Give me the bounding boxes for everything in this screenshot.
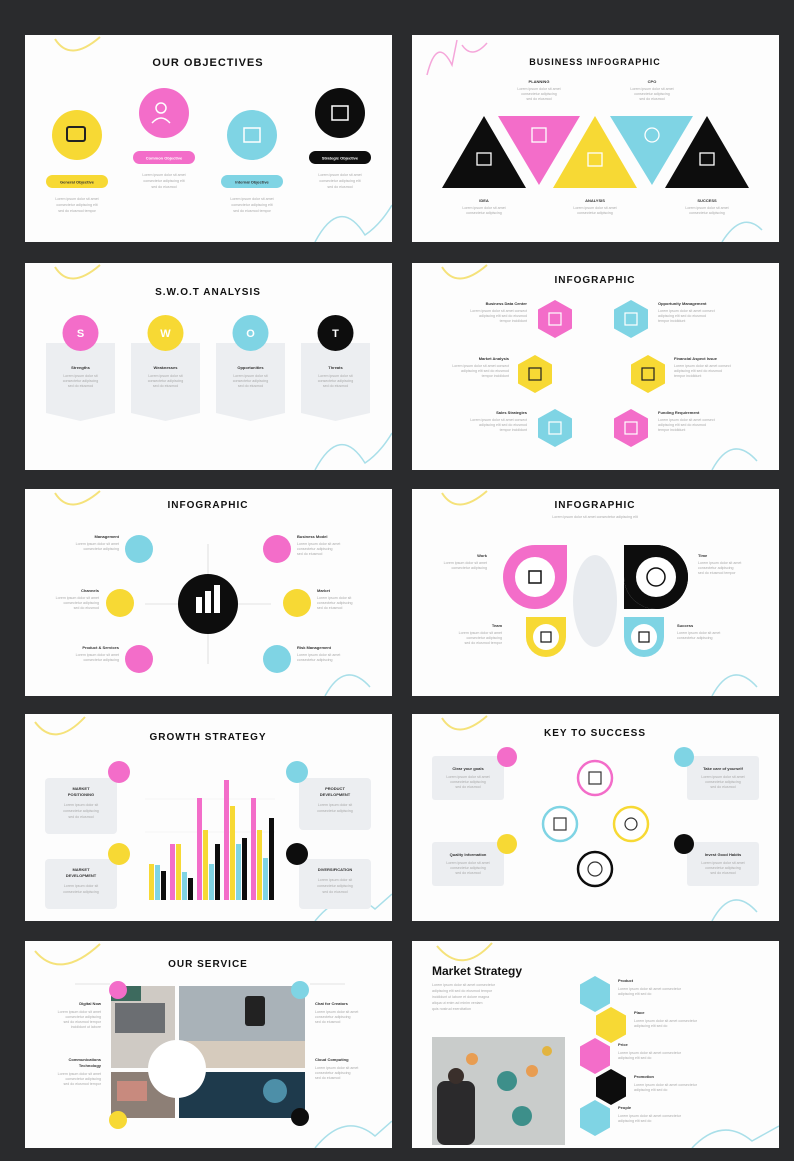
corner boxes: sed do eiusmod bbox=[455, 871, 481, 875]
hexagon labels: adipiscing elit sed do bbox=[634, 1024, 667, 1028]
left boxes: consectetur adipiscing bbox=[63, 890, 99, 894]
swot columns: Weaknesses bbox=[154, 365, 178, 370]
text left: tempor incididunt bbox=[500, 319, 527, 323]
hexagon labels: Lorem ipsum dolor sit amet consectetur bbox=[634, 1019, 698, 1023]
objective: pink: sed do eiusmod bbox=[151, 185, 177, 189]
swot columns: Threats bbox=[328, 365, 343, 370]
service text left: incididunt ut labore bbox=[71, 1025, 101, 1029]
hexagon labels: Promotion bbox=[634, 1074, 655, 1079]
hub text right bbox=[297, 534, 353, 662]
service text right: Chat for Creators bbox=[315, 1001, 349, 1006]
text left: Lorem ipsum dolor sit amet consect bbox=[470, 309, 527, 313]
hexagon labels: People bbox=[618, 1105, 632, 1110]
hub text right: Risk Management bbox=[297, 645, 332, 650]
service text left: sed do eiusmod tempor bbox=[63, 1082, 102, 1086]
text left: adipiscing elit sed do eiusmod bbox=[461, 369, 509, 373]
hub text right: Lorem ipsum dolor sit bbox=[317, 596, 351, 600]
swot columns: Lorem ipsum dolor sit bbox=[63, 374, 98, 378]
objective: black: Strategic Objective bbox=[322, 156, 359, 160]
teardrop labels: Time bbox=[698, 553, 708, 558]
teardrop labels: consectetur adipiscing bbox=[451, 566, 487, 570]
swot columns: sed do eiusmod bbox=[238, 384, 263, 388]
swot columns bbox=[46, 315, 370, 421]
hub text right: sed do eiusmod bbox=[317, 606, 342, 610]
service text right: Lorem ipsum dolor sit amet bbox=[315, 1010, 358, 1014]
title: Market Strategy bbox=[432, 964, 522, 978]
photo collage bbox=[75, 981, 345, 1129]
text right: tempor incididunt bbox=[658, 428, 685, 432]
teardrop labels: Lorem ipsum dolor sit amet bbox=[444, 561, 487, 565]
text right: adipiscing elit sed do eiusmod bbox=[658, 423, 706, 427]
swot columns: consectetur adipiscing bbox=[63, 379, 98, 383]
hub text left: Lorem ipsum dolor sit amet bbox=[76, 653, 119, 657]
corner boxes: Take care of yourself bbox=[703, 766, 744, 771]
teardrop labels: consectetur adipiscing bbox=[677, 636, 713, 640]
labels bottom: SUCCESS bbox=[697, 198, 717, 203]
corner boxes: Quality Information bbox=[450, 852, 487, 857]
text left: tempor incididunt bbox=[482, 374, 509, 378]
labels bottom: consectetur adipiscing bbox=[577, 211, 613, 215]
title: GROWTH STRATEGY bbox=[149, 732, 267, 743]
labels top: sed do eiusmod bbox=[639, 97, 665, 101]
left boxes: DEVELOPMENT bbox=[66, 873, 97, 878]
title: OUR SERVICE bbox=[168, 959, 248, 970]
corner boxes: Clear your goals bbox=[452, 766, 484, 771]
title: KEY TO SUCCESS bbox=[544, 728, 646, 739]
hub text right: Lorem ipsum dolor sit amet bbox=[297, 542, 340, 546]
objective: yellow: Lorem ipsum dolor sit amet bbox=[55, 197, 99, 201]
labels bottom: ANALYSIS bbox=[585, 198, 605, 203]
teardrop labels: Lorem ipsum dolor sit amet bbox=[459, 631, 502, 635]
teardrop labels: Lorem ipsum dolor sit amet bbox=[698, 561, 741, 565]
labels top: sed do eiusmod bbox=[526, 97, 552, 101]
labels bottom: consectetur adipiscing bbox=[466, 211, 502, 215]
left boxes: Lorem ipsum dolor sit bbox=[64, 884, 98, 888]
swot columns: sed do eiusmod bbox=[323, 384, 348, 388]
title: S.W.O.T ANALYSIS bbox=[155, 287, 261, 298]
labels bottom bbox=[462, 198, 729, 215]
labels top: Lorem ipsum dolor sit amet bbox=[517, 87, 561, 91]
intro text: aliqua ut enim ad minim veniam bbox=[432, 1001, 483, 1005]
title: BUSINESS INFOGRAPHIC bbox=[529, 57, 661, 67]
intro text: incididunt ut labore et dolore magna bbox=[432, 995, 489, 999]
hub text left: Product & Services bbox=[82, 645, 120, 650]
text right: Lorem ipsum dolor sit amet consect bbox=[658, 309, 715, 313]
service text right: consectetur adipiscing bbox=[315, 1015, 351, 1019]
hub text left: consectetur adipiscing bbox=[63, 601, 99, 605]
hub text left: Lorem ipsum dolor sit amet bbox=[76, 542, 119, 546]
right boxes: PRODUCT bbox=[325, 786, 345, 791]
text left: adipiscing elit sed do eiusmod bbox=[479, 423, 527, 427]
hub text left bbox=[56, 534, 120, 662]
objective: pink bbox=[133, 88, 195, 189]
text left: adipiscing elit sed do eiusmod bbox=[479, 314, 527, 318]
service text left: sed do eiusmod tempor bbox=[63, 1020, 102, 1024]
ring icons bbox=[543, 761, 648, 886]
swot columns: S bbox=[77, 328, 84, 340]
teardrop diagram bbox=[503, 545, 688, 657]
labels bottom: consectetur adipiscing bbox=[689, 211, 725, 215]
text right: adipiscing elit sed do eiusmod bbox=[674, 369, 722, 373]
objective: yellow: sed do eiusmod tempor bbox=[58, 209, 97, 213]
swot columns: O bbox=[246, 328, 255, 340]
objective: pink: Common Objective bbox=[146, 156, 183, 160]
service text right: sed do eiusmod bbox=[315, 1020, 340, 1024]
slide: infographic teardrops bbox=[412, 489, 779, 696]
text left: Business Data Center bbox=[486, 301, 527, 306]
teardrop labels: consectetur adipiscing bbox=[698, 566, 734, 570]
hub text left: consectetur adipiscing bbox=[83, 658, 119, 662]
corner boxes: Lorem ipsum dolor sit amet bbox=[446, 861, 490, 865]
bar chart bbox=[145, 780, 275, 900]
text right: tempor incididunt bbox=[658, 319, 685, 323]
photo bbox=[432, 1037, 565, 1145]
right boxes: Lorem ipsum dolor sit bbox=[318, 803, 352, 807]
left boxes bbox=[45, 761, 130, 909]
service text right: Lorem ipsum dolor sit amet bbox=[315, 1066, 358, 1070]
text left: Lorem ipsum dolor sit amet consect bbox=[452, 364, 509, 368]
corner boxes: consectetur adipiscing bbox=[450, 866, 486, 870]
swot columns: sed do eiusmod bbox=[68, 384, 93, 388]
labels top bbox=[517, 79, 674, 101]
hub text right: consectetur adipiscing bbox=[317, 601, 353, 605]
corner boxes: consectetur adipiscing bbox=[450, 780, 486, 784]
hexagon labels: Product bbox=[618, 978, 634, 983]
service text left: consectetur adipiscing bbox=[65, 1077, 101, 1081]
text right: Funding Requirement bbox=[658, 410, 700, 415]
labels bottom: IDEA bbox=[479, 198, 489, 203]
service text left: consectetur adipiscing bbox=[65, 1015, 101, 1019]
left boxes: MARKET bbox=[72, 786, 90, 791]
text left: tempor incididunt bbox=[500, 428, 527, 432]
corner boxes: Lorem ipsum dolor sit amet bbox=[446, 775, 490, 779]
right boxes: consectetur adipiscing bbox=[317, 884, 353, 888]
triangles chart bbox=[442, 116, 749, 188]
title: OUR OBJECTIVES bbox=[152, 57, 264, 69]
objective: black: sed do eiusmod bbox=[327, 185, 353, 189]
right boxes bbox=[286, 761, 371, 909]
hexagon labels bbox=[618, 978, 698, 1123]
service text left bbox=[58, 1001, 102, 1086]
left boxes: Lorem ipsum dolor sit bbox=[64, 803, 98, 807]
objective: black bbox=[309, 88, 371, 189]
swot columns: Lorem ipsum dolor sit bbox=[233, 374, 268, 378]
swot columns: Strengths bbox=[71, 365, 91, 370]
hub text left: consectetur adipiscing bbox=[83, 547, 119, 551]
service text right: sed do eiusmod bbox=[315, 1076, 340, 1080]
hub text right: consectetur adipiscing bbox=[297, 547, 333, 551]
hexagon labels: Lorem ipsum dolor sit amet consectetur bbox=[618, 1114, 682, 1118]
service text left: Lorem ipsum dolor sit amet bbox=[58, 1072, 101, 1076]
objective: black: consectetur adipiscing elit bbox=[319, 179, 361, 183]
swot columns: T bbox=[332, 328, 339, 340]
slide: business infographic bbox=[412, 35, 779, 242]
hub text right: Lorem ipsum dolor sit amet bbox=[297, 653, 340, 657]
teardrop labels bbox=[444, 553, 741, 645]
corner boxes bbox=[432, 747, 759, 886]
text right: Lorem ipsum dolor sit amet consect bbox=[658, 418, 715, 422]
text left: Sales Strategies bbox=[496, 410, 528, 415]
labels bottom: Lorem ipsum dolor sit amet bbox=[573, 206, 617, 210]
objective: cyan: Lorem ipsum dolor sit amet bbox=[230, 197, 274, 201]
service text right: consectetur adipiscing bbox=[315, 1071, 351, 1075]
hexagon stack bbox=[580, 976, 626, 1136]
corner boxes: consectetur adipiscing bbox=[705, 866, 741, 870]
objective: black: Lorem ipsum dolor sit amet bbox=[318, 173, 362, 177]
hub text right: sed do eiusmod bbox=[297, 552, 322, 556]
labels top: PLANNING bbox=[529, 79, 549, 84]
slide: our objectives bbox=[25, 35, 392, 242]
text right: Financial Aspect Issue bbox=[674, 356, 718, 361]
right boxes: consectetur adipiscing bbox=[317, 809, 353, 813]
hub text left: Channels bbox=[81, 588, 100, 593]
hexagon grid bbox=[518, 300, 665, 447]
hub text left: Management bbox=[95, 534, 120, 539]
intro text: adipiscing elit sed do eiusmod tempor bbox=[432, 989, 493, 993]
hub text right: consectetur adipiscing bbox=[297, 658, 333, 662]
hexagon labels: Place bbox=[634, 1010, 645, 1015]
hexagon labels: Lorem ipsum dolor sit amet consectetur bbox=[618, 1051, 682, 1055]
teardrop labels: sed do eiusmod tempor bbox=[464, 641, 503, 645]
hexagon labels: adipiscing elit sed do bbox=[618, 1119, 651, 1123]
service text right: Cloud Computing bbox=[315, 1057, 349, 1062]
swot columns: sed do eiusmod bbox=[153, 384, 178, 388]
objective: yellow bbox=[46, 110, 108, 213]
objective: cyan: sed do eiusmod tempor bbox=[233, 209, 272, 213]
slide: key to success bbox=[412, 714, 779, 921]
service text left: Communications bbox=[69, 1057, 102, 1062]
text right: Lorem ipsum dolor sit amet consect bbox=[674, 364, 731, 368]
swot columns: Opportunities bbox=[237, 365, 264, 370]
corner boxes: sed do eiusmod bbox=[710, 785, 736, 789]
text left: Lorem ipsum dolor sit amet consect bbox=[470, 418, 527, 422]
hub diagram bbox=[106, 535, 311, 673]
hub text right: Business Model bbox=[297, 534, 327, 539]
hub text left: sed do eiusmod bbox=[74, 606, 99, 610]
hexagon labels: Price bbox=[618, 1042, 629, 1047]
corner boxes: sed do eiusmod bbox=[710, 871, 736, 875]
hexagon labels: adipiscing elit sed do bbox=[618, 992, 651, 996]
slide: swot analysis bbox=[25, 263, 392, 470]
teardrop labels: Lorem ipsum dolor sit amet bbox=[677, 631, 720, 635]
corner boxes: Lorem ipsum dolor sit amet bbox=[701, 861, 745, 865]
objective: cyan bbox=[221, 110, 283, 213]
objective: cyan: consectetur adipiscing elit bbox=[231, 203, 273, 207]
text right bbox=[658, 301, 731, 432]
labels bottom: Lorem ipsum dolor sit amet bbox=[685, 206, 729, 210]
intro text: Lorem ipsum dolor sit amet consectetur bbox=[432, 983, 496, 987]
teardrop labels: sed do eiusmod tempor bbox=[698, 571, 736, 575]
slide: our service bbox=[25, 941, 392, 1148]
slide: growth strategy bbox=[25, 714, 392, 921]
title: INFOGRAPHIC bbox=[554, 500, 636, 511]
hexagon labels: Lorem ipsum dolor sit amet consectetur bbox=[618, 987, 682, 991]
slide: market strategy bbox=[412, 941, 779, 1148]
slide: infographic hexagons bbox=[412, 263, 779, 470]
text left bbox=[452, 301, 528, 432]
right boxes: DEVELOPMENT bbox=[320, 792, 351, 797]
text right: Opportunity Management bbox=[658, 301, 707, 306]
slide: infographic teardrops: Lorem ipsum dolor sit amet consectetur adipiscing elit bbox=[552, 515, 638, 519]
right boxes: Lorem ipsum dolor sit bbox=[318, 878, 352, 882]
corner boxes: sed do eiusmod bbox=[455, 785, 481, 789]
left boxes: POSITIONING bbox=[68, 792, 94, 797]
hexagon labels: adipiscing elit sed do bbox=[618, 1056, 651, 1060]
corner boxes: Lorem ipsum dolor sit amet bbox=[701, 775, 745, 779]
left boxes: sed do eiusmod bbox=[68, 815, 94, 819]
intro text: quis nostrud exercitation bbox=[432, 1007, 471, 1011]
title: INFOGRAPHIC bbox=[168, 500, 248, 511]
service text left: Digital Now bbox=[79, 1001, 102, 1006]
labels top: CPO bbox=[648, 79, 656, 84]
text left: Market Analysis bbox=[479, 356, 510, 361]
labels bottom: Lorem ipsum dolor sit amet bbox=[462, 206, 506, 210]
intro text bbox=[432, 983, 496, 1011]
corner boxes: consectetur adipiscing bbox=[705, 780, 741, 784]
swot columns: W bbox=[160, 328, 171, 340]
corner boxes: Invest Good Habits bbox=[705, 852, 742, 857]
hexagon labels: Lorem ipsum dolor sit amet consectetur bbox=[634, 1083, 698, 1087]
left boxes: consectetur adipiscing bbox=[63, 809, 99, 813]
swot columns: Lorem ipsum dolor sit bbox=[318, 374, 353, 378]
swot columns: consectetur adipiscing bbox=[148, 379, 183, 383]
right boxes: sed do eiusmod bbox=[322, 890, 348, 894]
swot columns: consectetur adipiscing bbox=[318, 379, 353, 383]
labels top: Lorem ipsum dolor sit amet bbox=[630, 87, 674, 91]
objective: yellow: consectetur adipiscing elit bbox=[56, 203, 98, 207]
labels top: consectetur adipiscing bbox=[521, 92, 557, 96]
hexagon labels: adipiscing elit sed do bbox=[634, 1088, 667, 1092]
hub text left: Lorem ipsum dolor sit amet bbox=[56, 596, 99, 600]
teardrop labels: Team bbox=[492, 623, 502, 628]
title: INFOGRAPHIC bbox=[554, 275, 636, 286]
teardrop labels: Success bbox=[677, 623, 694, 628]
swot columns: Lorem ipsum dolor sit bbox=[148, 374, 183, 378]
right boxes: DIVERSIFICATION bbox=[318, 867, 352, 872]
teardrop labels: consectetur adipiscing bbox=[466, 636, 502, 640]
objective: yellow: General Objective bbox=[60, 180, 95, 184]
objective: pink: Lorem ipsum dolor sit amet bbox=[142, 173, 186, 177]
objective: pink: consectetur adipiscing elit bbox=[143, 179, 185, 183]
text right: tempor incididunt bbox=[674, 374, 701, 378]
labels top: consectetur adipiscing bbox=[634, 92, 670, 96]
swot columns: consectetur adipiscing bbox=[233, 379, 268, 383]
slide: infographic hub bbox=[25, 489, 392, 696]
service text left: Technology bbox=[79, 1063, 102, 1068]
left boxes: MARKET bbox=[72, 867, 90, 872]
service text right bbox=[315, 1001, 358, 1080]
text right: adipiscing elit sed do eiusmod bbox=[658, 314, 706, 318]
hub text right: Market bbox=[317, 588, 331, 593]
service text left: Lorem ipsum dolor sit amet bbox=[58, 1010, 101, 1014]
objective: cyan: Internal Objective bbox=[235, 180, 270, 184]
teardrop labels: Work bbox=[477, 553, 488, 558]
